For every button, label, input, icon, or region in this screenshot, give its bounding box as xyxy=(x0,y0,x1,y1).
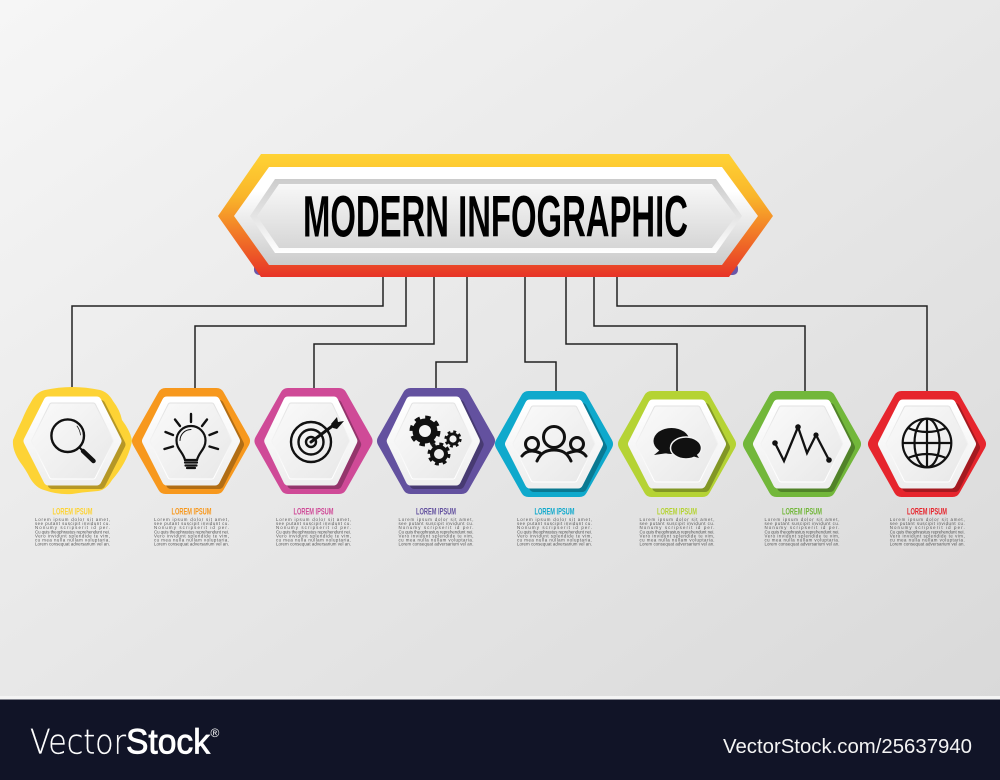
text block 2: see putant suscipit invidunt cu. xyxy=(154,521,229,526)
text block 3: Nonumy scripserit id per. xyxy=(276,525,351,530)
text block 2: cu mea nulla nullam voluptaria. xyxy=(154,538,229,542)
text block 4: Vero invidunt splendide te vim, xyxy=(398,533,474,538)
text block 6: cu mea nulla nullam voluptaria. xyxy=(640,538,715,542)
text block 6: Lorem ipsum dolor sit amet, xyxy=(640,517,714,522)
text block 7: Vero invidunt splendide te vim, xyxy=(764,533,840,538)
text block 7: see putant suscipit invidunt cu. xyxy=(764,521,840,526)
step 6: communication xyxy=(626,399,728,489)
text block 2: Lorem consequat adversarium vel an. xyxy=(154,542,229,547)
footer logo: ® xyxy=(210,726,220,740)
text block 4: Cu quis theophrastus reprehendunt nei. xyxy=(398,529,474,534)
text block 8: Lorem ipsum dolor sit amet, xyxy=(890,517,965,522)
text block 1: cu mea nulla nullam voluptaria. xyxy=(35,538,110,542)
text block 1: Lorem ipsum dolor sit amet, xyxy=(35,517,110,522)
text block 1: Nonumy scripserit id per. xyxy=(35,525,110,530)
text block 6: Vero invidunt splendide te vim, xyxy=(640,533,714,538)
footer logo xyxy=(30,722,220,762)
step 3: target xyxy=(262,396,364,486)
text block 8: see putant suscipit invidunt cu. xyxy=(890,521,965,526)
step 8: globe xyxy=(876,399,978,489)
text block 3: see putant suscipit invidunt cu. xyxy=(276,521,351,526)
text block 7: Cu quis theophrastus reprehendunt nei. xyxy=(764,529,840,534)
text block 3: cu mea nulla nullam voluptaria. xyxy=(276,538,351,542)
step 4: settings xyxy=(385,396,487,486)
icon: globe xyxy=(903,419,951,467)
text block 5: cu mea nulla nullam voluptaria. xyxy=(517,538,592,542)
text block 3: Lorem ipsum dolor sit amet, xyxy=(276,517,351,522)
icon: line chart xyxy=(772,424,832,463)
text block 6: Nonumy scripserit id per. xyxy=(640,525,714,530)
icon: light bulb xyxy=(164,414,218,468)
text block 5: Vero invidunt splendide te vim, xyxy=(517,533,592,538)
text block 3 xyxy=(276,506,351,547)
connector lines xyxy=(72,277,927,392)
text block 5: Cu quis theophrastus reprehendunt nei. xyxy=(517,529,592,534)
text block 4: see putant suscipit invidunt cu. xyxy=(398,521,474,526)
text block 7: Lorem consequat adversarium vel an. xyxy=(764,542,840,547)
text block 8: cu mea nulla nullam voluptaria. xyxy=(890,538,965,542)
step 2: idea xyxy=(140,396,242,486)
text block 4: Lorem ipsum dolor sit amet, xyxy=(398,517,474,522)
text block 5 xyxy=(517,506,592,547)
footer image id: VectorStock.com/25637940 xyxy=(723,735,972,758)
text block 6: Lorem consequat adversarium vel an. xyxy=(640,542,714,547)
text block 8: Vero invidunt splendide te vim, xyxy=(890,533,965,538)
text block 5: see putant suscipit invidunt cu. xyxy=(517,521,592,526)
text block 1: Lorem consequat adversarium vel an. xyxy=(35,542,110,547)
text block 7 xyxy=(764,506,840,547)
step 1: search xyxy=(13,387,132,494)
text block 2: Lorem ipsum dolor sit amet, xyxy=(154,517,229,522)
text block 7: Lorem ipsum dolor sit amet, xyxy=(764,517,840,522)
text block 1 xyxy=(35,506,110,547)
text block 5: Lorem consequat adversarium vel an. xyxy=(517,542,592,547)
text block 6: LOREM IPSUM xyxy=(657,506,697,518)
text block 1: Cu quis theophrastus reprehendunt nei. xyxy=(35,529,110,534)
text block 3: Vero invidunt splendide te vim, xyxy=(276,533,351,538)
icon: target with arrow xyxy=(291,417,344,462)
text block 6 xyxy=(640,506,714,547)
icon: people xyxy=(522,426,586,461)
step 7: chart xyxy=(751,399,853,489)
text block 1: LOREM IPSUM xyxy=(52,506,92,518)
icon: speech bubbles xyxy=(654,428,702,459)
title: MODERN INFOGRAPHIC xyxy=(303,184,688,250)
text block 6: see putant suscipit invidunt cu. xyxy=(640,521,714,526)
text block 4: LOREM IPSUM xyxy=(416,506,456,518)
text block 4 xyxy=(398,506,474,547)
text block 1: Vero invidunt splendide te vim, xyxy=(35,533,110,538)
text block 4: Lorem consequat adversarium vel an. xyxy=(398,542,474,547)
text block 8: Cu quis theophrastus reprehendunt nei. xyxy=(890,529,965,534)
text block 2: Nonumy scripserit id per. xyxy=(154,525,229,530)
text block 7: LOREM IPSUM xyxy=(782,506,822,518)
text block 8: Lorem consequat adversarium vel an. xyxy=(890,542,965,547)
text block 2 xyxy=(154,506,229,547)
icon: magnifying glass xyxy=(51,419,94,461)
text block 3: LOREM IPSUM xyxy=(294,506,334,518)
text block 4: cu mea nulla nullam voluptaria. xyxy=(398,538,474,542)
text block 8: Nonumy scripserit id per. xyxy=(890,525,965,530)
text block 7: Nonumy scripserit id per. xyxy=(764,525,840,530)
footer bar xyxy=(0,696,1000,780)
text block 8 xyxy=(890,506,965,547)
text block 2: Vero invidunt splendide te vim, xyxy=(154,533,229,538)
title banner xyxy=(218,154,773,277)
text block 5: LOREM IPSUM xyxy=(534,506,574,518)
text block 8: LOREM IPSUM xyxy=(907,506,947,518)
icon: gears xyxy=(412,418,460,464)
text block 4: Nonumy scripserit id per. xyxy=(398,525,474,530)
text block 7: cu mea nulla nullam voluptaria. xyxy=(764,538,840,542)
text block 1: see putant suscipit invidunt cu. xyxy=(35,521,110,526)
footer logo: Stock xyxy=(126,722,210,762)
text block 3: Lorem consequat adversarium vel an. xyxy=(276,542,351,547)
footer logo: Vector xyxy=(30,722,126,762)
text block 6: Cu quis theophrastus reprehendunt nei. xyxy=(640,529,714,534)
text block 2: LOREM IPSUM xyxy=(172,506,212,518)
text block 3: Cu quis theophrastus reprehendunt nei. xyxy=(276,529,351,534)
text block 5: Lorem ipsum dolor sit amet, xyxy=(517,517,592,522)
step 5: team xyxy=(503,399,605,489)
text block 5: Nonumy scripserit id per. xyxy=(517,525,592,530)
text block 2: Cu quis theophrastus reprehendunt nei. xyxy=(154,529,229,534)
